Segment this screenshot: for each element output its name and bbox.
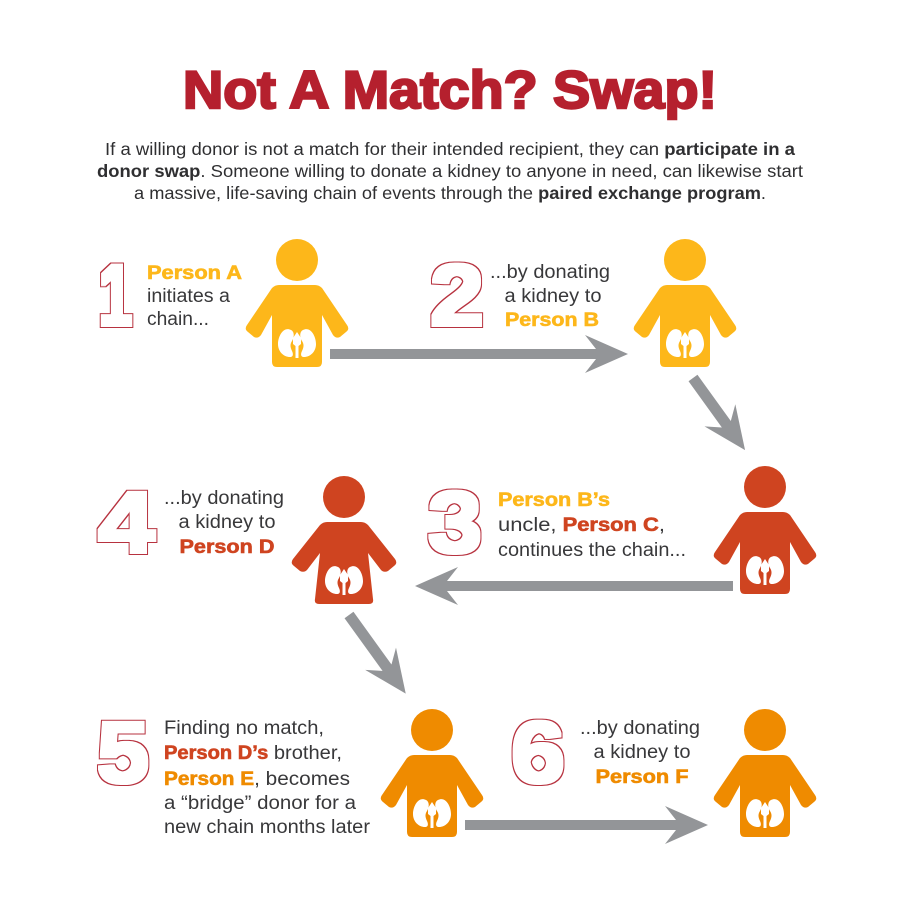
step 3 text: Person B’s: [498, 490, 610, 511]
step 2 text: a kidney to: [504, 286, 602, 307]
step 2 number: 2: [430, 248, 484, 344]
step 4 text: [164, 488, 284, 558]
step 6 text: ...by donating: [580, 718, 700, 739]
arrow: E to F: [465, 806, 708, 844]
step 6 text: a kidney to: [594, 742, 690, 763]
arrow: A to B: [330, 335, 628, 373]
step 3 text: uncle, Person C ,: [498, 515, 665, 536]
step 1 number: 1: [99, 248, 132, 344]
title: Not A Match? Swap!: [183, 61, 717, 120]
icon: person A with kidneys: [246, 239, 348, 367]
step 4 number: 4: [98, 475, 155, 571]
step 6 text: [580, 718, 700, 788]
arrow: B to C: [678, 367, 760, 461]
step 5 number: 5: [97, 705, 149, 801]
step 1 text: chain...: [147, 309, 209, 330]
step 5 text: Person E , becomes: [164, 769, 350, 790]
step 4 text: Person D: [180, 537, 274, 558]
intro text: donor swap . Someone willing to donate a kidney to anyone in need, can likewise start: [97, 161, 803, 181]
arrow: D to E: [334, 604, 421, 705]
step 2 text: [490, 262, 610, 331]
step 5 text: Person D’s brother,: [164, 743, 342, 764]
intro text: [97, 139, 803, 203]
step 5 text: Finding no match,: [164, 718, 324, 739]
icon: person F with kidneys: [714, 709, 816, 837]
step 5 text: new chain months later: [164, 817, 371, 838]
step 5 text: [164, 718, 371, 838]
step 3 number: 3: [428, 475, 482, 571]
step 3 text: continues the chain...: [498, 540, 686, 561]
arrow: C to D: [415, 567, 733, 605]
step 3 text: [498, 490, 686, 561]
intro text: If a willing donor is not a match for their intended recipient, they can participate in a: [105, 139, 795, 159]
step 2 text: ...by donating: [490, 262, 610, 283]
step 1 text: initiates a: [147, 286, 230, 307]
step 5 text: a “bridge” donor for a: [164, 793, 356, 814]
icon: person C with kidneys: [714, 466, 816, 594]
step 6 number: 6: [511, 705, 565, 801]
step 2 text: Person B: [505, 310, 599, 331]
icon: person B with kidneys: [634, 239, 736, 367]
icon: person E with kidneys: [381, 709, 483, 837]
icon: person D with kidneys, dress: [292, 476, 396, 604]
step 1 text: [147, 263, 242, 330]
step 4 text: a kidney to: [178, 512, 276, 533]
step 4 text: ...by donating: [164, 488, 284, 509]
intro text: a massive, life-saving chain of events through the paired exchange program .: [134, 183, 766, 203]
step 6 text: Person F: [596, 767, 688, 788]
step 1 text: Person A: [147, 263, 242, 284]
